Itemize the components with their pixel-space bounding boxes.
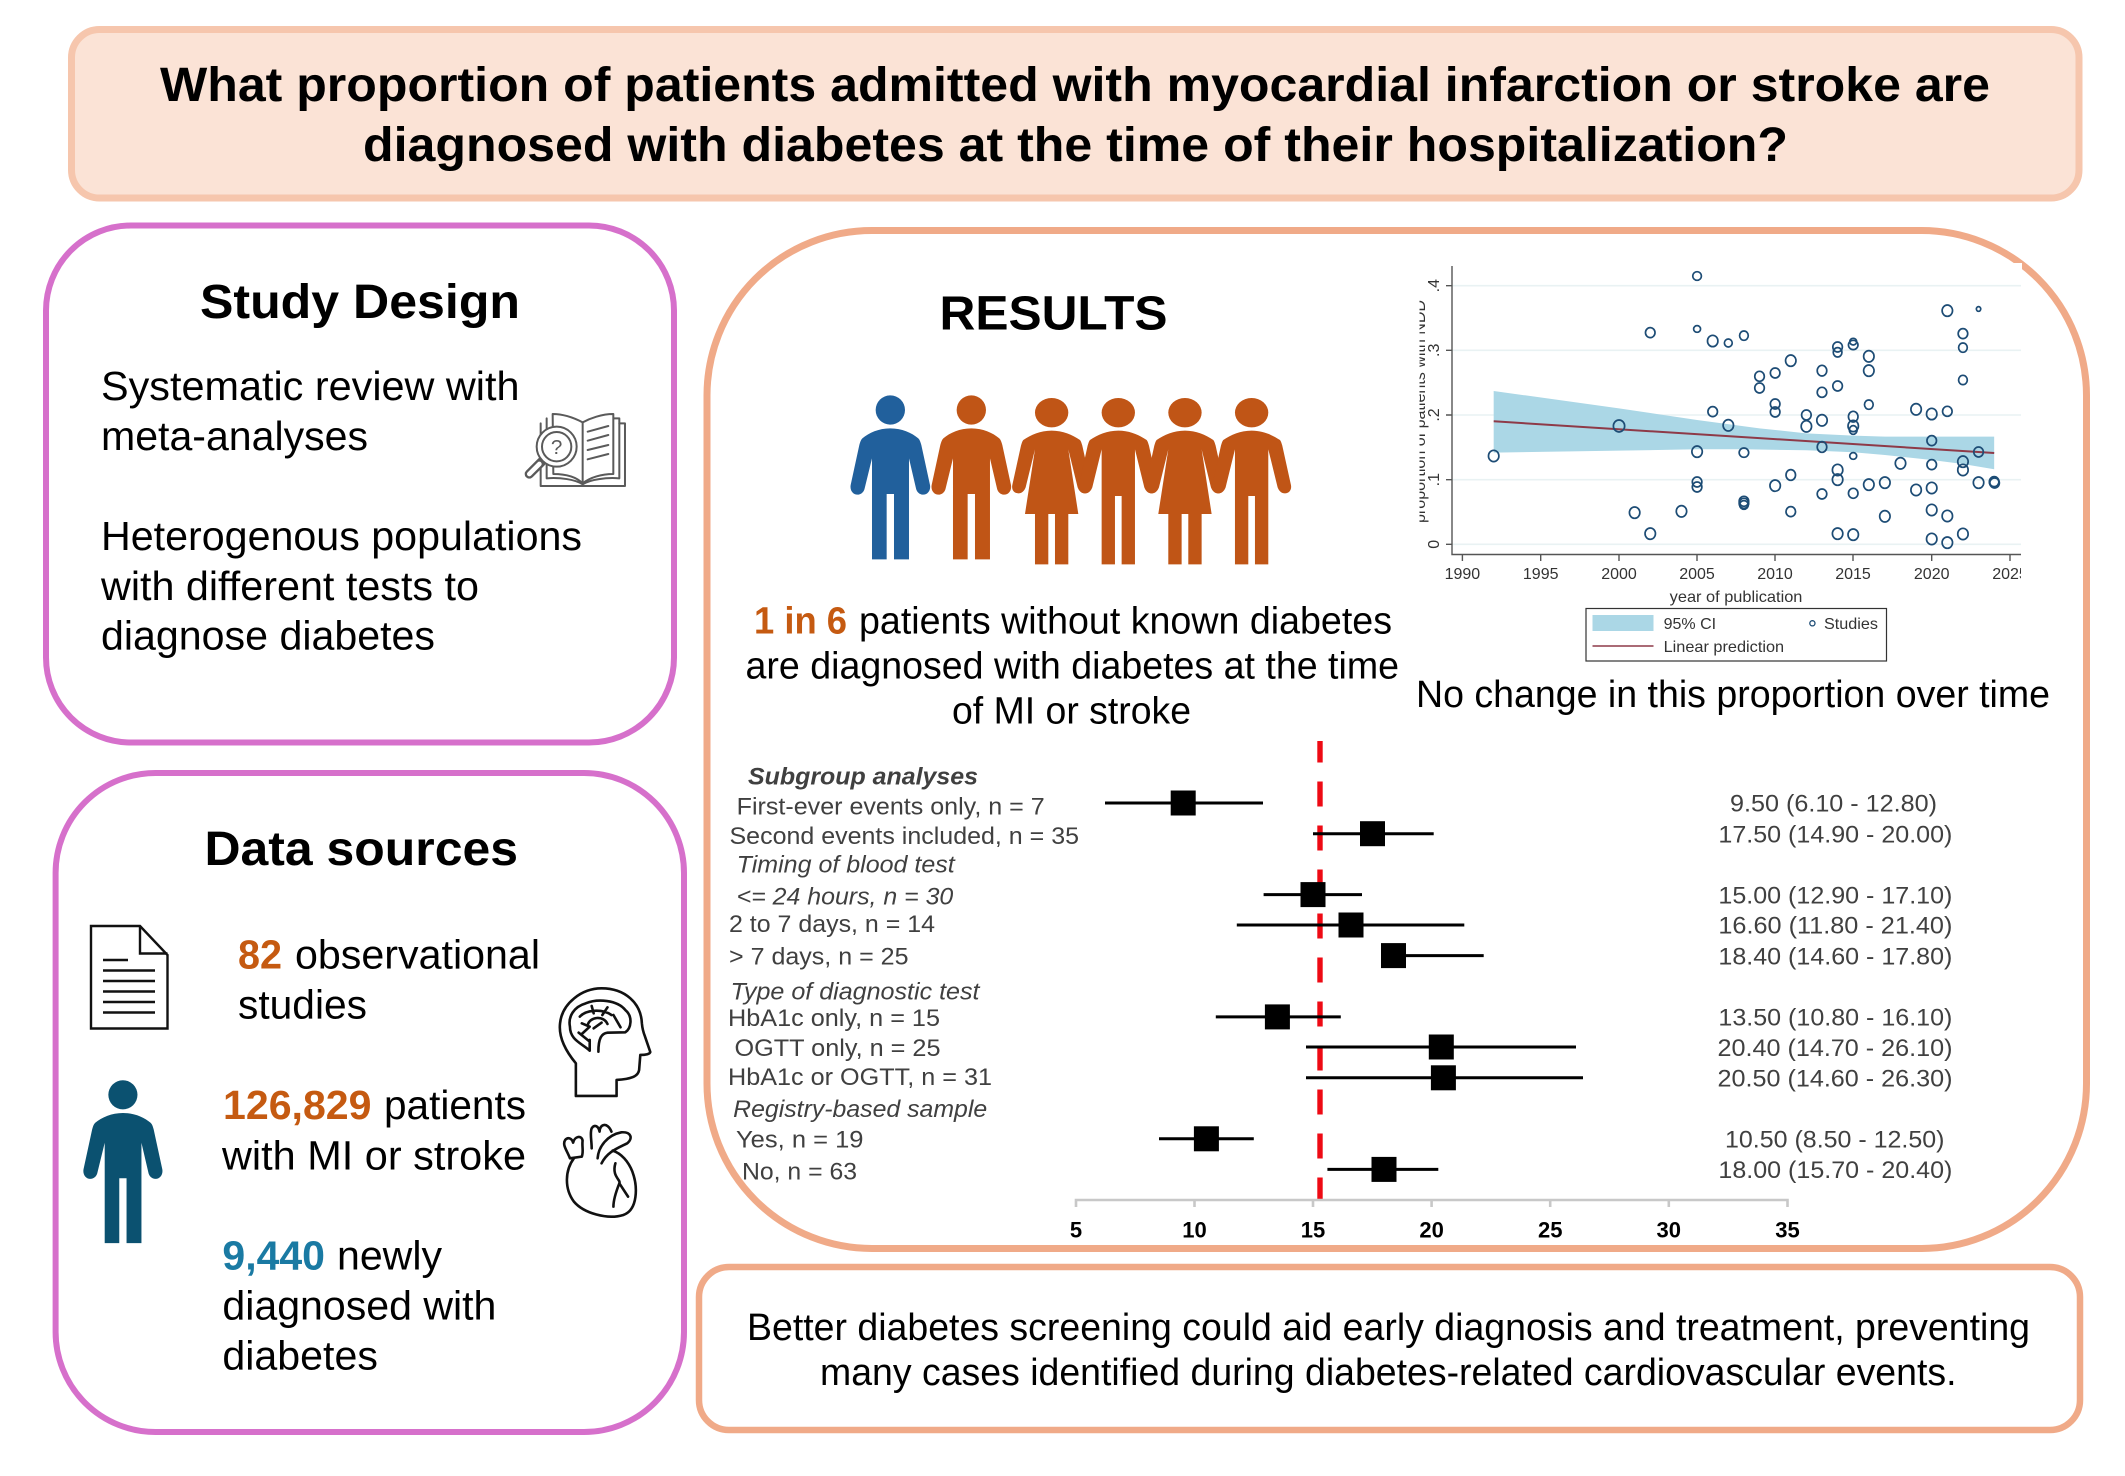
icon: six people, one highlighted: [850, 395, 1291, 564]
panel: data sources: [56, 773, 684, 1432]
stat: patients: with MI or stroke: [221, 1132, 526, 1178]
legend: [1586, 608, 1886, 661]
forest row labels: Subgroup analyses: [748, 764, 978, 790]
text: 1 in 6 finding: patients without known diabetes: [859, 600, 1392, 642]
conclusion text: many cases identified during diabetes-related cardiovascular events.: [820, 1352, 1956, 1394]
forest row labels: Second events included, n = 35: [730, 823, 1079, 850]
forest value labels: 10.50 (8.50 - 12.50): [1725, 1126, 1944, 1153]
icon: person: [83, 1080, 162, 1243]
forest value labels: 13.50 (10.80 - 16.10): [1718, 1004, 1952, 1032]
text: 1 in 6 finding: of MI or stroke: [952, 690, 1191, 732]
x axis labels: 2020: [1914, 566, 1950, 583]
forest value labels: [1718, 791, 1952, 1184]
confidence band: [1494, 391, 1994, 469]
stat: newly diagnosed: [222, 1232, 496, 1378]
legend: 95% CI: [1664, 616, 1716, 633]
study points: [1488, 272, 1999, 548]
forest value labels: 20.40 (14.70 - 26.10): [1718, 1035, 1952, 1062]
forest value labels: 16.60 (11.80 - 21.40): [1718, 912, 1952, 940]
forest x axis: 25: [1538, 1218, 1562, 1242]
forest row labels: OGTT only, n = 25: [734, 1035, 940, 1062]
forest x axis: 30: [1657, 1218, 1681, 1242]
conclusion text: [747, 1307, 2030, 1394]
forest row labels: Yes, n = 19: [736, 1126, 864, 1153]
y axis labels: 0: [1426, 540, 1443, 549]
text: systematic review: [101, 363, 520, 459]
stat: patients: patients: [384, 1082, 526, 1128]
y axis labels: .4: [1426, 279, 1443, 292]
title text: What proportion of patients admitted with myocardial infarction or stroke are: [160, 59, 1990, 112]
text: heterogenous populations: Heterogenous populations: [101, 513, 582, 559]
text: heterogenous populations: diagnose diabetes: [101, 612, 435, 658]
forest row labels: No, n = 63: [742, 1159, 857, 1186]
text: 1 in 6 finding: are diagnosed with diabetes at the time: [746, 646, 1399, 688]
icon: heart: [564, 1125, 636, 1217]
icon: document: [91, 926, 168, 1028]
x axis labels: 2000: [1601, 566, 1637, 583]
y axis labels: .1: [1426, 473, 1443, 486]
forest value labels: 9.50 (6.10 - 12.80): [1730, 791, 1937, 818]
stat: newly diagnosed: diagnosed with: [222, 1282, 496, 1328]
heading: results: RESULTS: [940, 288, 1168, 340]
forest estimates: [1105, 790, 1583, 1182]
stat: patients: 126,829: [223, 1082, 372, 1128]
forest row labels: Registry-based sample: [733, 1096, 987, 1123]
forest row labels: HbA1c only, n = 15: [728, 1005, 940, 1032]
title banner: [72, 30, 2079, 198]
text: 1 in 6 finding: [746, 600, 1399, 732]
pooled estimate reference line: [1317, 741, 1323, 1200]
stat: observational studies: [238, 932, 540, 1028]
panel: results: [707, 230, 2086, 1248]
forest value labels: 20.50 (14.60 - 26.30): [1718, 1065, 1952, 1092]
legend: Studies: [1824, 616, 1878, 633]
icon: brain in head: [560, 988, 650, 1096]
forest value labels: 18.00 (15.70 - 20.40): [1718, 1157, 1952, 1184]
forest x axis: 15: [1301, 1218, 1325, 1242]
forest row labels: 2 to 7 days, n = 14: [729, 911, 935, 938]
x axis labels: 2025: [1992, 566, 2028, 583]
x axis labels: 1995: [1523, 566, 1559, 583]
title text: diagnosed with diabetes at the time of their hospitalization?: [363, 119, 1788, 172]
axes: [1446, 266, 2021, 561]
icon: book and magnifier: [529, 414, 625, 486]
chart: scatter of proportion by publication year: [1410, 263, 2028, 680]
stat: observational studies: 82: [238, 932, 282, 978]
y axis title, cropped: proportion of patients with NDD: [1412, 300, 1429, 523]
forest value labels: 18.40 (14.60 - 17.80): [1718, 944, 1952, 970]
forest row labels: HbA1c or OGTT, n = 31: [728, 1064, 992, 1091]
stat: newly diagnosed: 9,440: [222, 1232, 325, 1278]
panel: conclusion: [699, 1267, 2080, 1430]
text: no change over time: No change in this proportion over time: [1416, 674, 2050, 716]
icon: book and magnifier: ?: [551, 436, 562, 459]
forest row labels: <= 24 hours, n = 30: [737, 884, 954, 911]
legend: Linear prediction: [1664, 639, 1784, 656]
linear prediction line: [1494, 421, 1994, 453]
x axis title: year of publication: [1670, 589, 1802, 606]
x axis labels: 1990: [1445, 566, 1480, 583]
text: heterogenous populations: [100, 513, 582, 658]
conclusion text: Better diabetes screening could aid early diagnosis and treatment, preventing: [747, 1307, 2030, 1349]
stat: observational studies: studies: [238, 982, 367, 1028]
text: systematic review: meta-analyses: [101, 413, 368, 459]
title text: [160, 59, 1990, 172]
x axis labels: 2005: [1679, 566, 1715, 583]
stat: newly diagnosed: newly: [337, 1232, 442, 1278]
panel: study design: [46, 226, 674, 742]
x axis labels: 2015: [1835, 566, 1871, 583]
y axis labels: [1426, 279, 1443, 549]
y axis labels: .3: [1426, 344, 1443, 357]
x axis labels: 2010: [1757, 566, 1793, 583]
forest row labels: First-ever events only, n = 7: [737, 794, 1045, 820]
stat: patients: [221, 1082, 526, 1178]
stat: newly diagnosed: diabetes: [222, 1332, 378, 1378]
forest x axis: [1070, 1200, 1800, 1242]
forest row labels: Timing of blood test: [737, 852, 956, 879]
forest row labels: Type of diagnostic test: [730, 978, 981, 1005]
stat: observational studies: observational: [295, 932, 540, 978]
forest x axis: 5: [1070, 1218, 1082, 1242]
text: heterogenous populations: with different tests to: [100, 563, 479, 609]
y axis labels: .2: [1426, 408, 1443, 422]
forest x axis: 35: [1775, 1218, 1800, 1242]
forest x axis: 20: [1419, 1218, 1444, 1242]
chart: forest plot of subgroup analyses: [728, 741, 1952, 1242]
forest row labels: > 7 days, n = 25: [729, 944, 908, 970]
text: systematic review: Systematic review with: [101, 363, 520, 409]
text: 1 in 6 finding: 1 in 6: [754, 600, 847, 642]
heading: study design: Study Design: [200, 276, 520, 329]
x axis labels: [1446, 568, 2021, 579]
forest x axis: 10: [1182, 1218, 1207, 1242]
heading: data sources: Data sources: [204, 823, 518, 876]
forest value labels: 15.00 (12.90 - 17.10): [1718, 883, 1952, 910]
forest row labels: [728, 764, 1079, 1186]
forest value labels: 17.50 (14.90 - 20.00): [1718, 822, 1952, 849]
